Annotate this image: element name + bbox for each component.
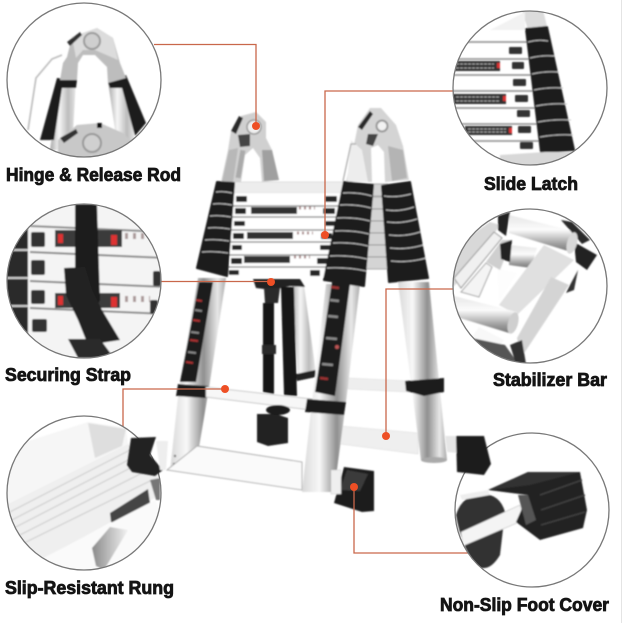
grips — [197, 182, 428, 286]
connector: foot cover — [350, 483, 483, 553]
connector: securing strap — [161, 278, 275, 286]
label: hinge: Hinge & Release Rod — [6, 165, 181, 185]
front foot — [331, 467, 374, 512]
panel: foot cover detail — [455, 433, 609, 587]
rear-left foot — [257, 414, 288, 446]
safety rung — [206, 387, 312, 410]
connector: slip-resistant rung — [123, 385, 229, 428]
connector: slide latch — [321, 91, 454, 239]
rear-left tube behind strap — [292, 285, 316, 376]
hinge: left — [221, 112, 279, 182]
rungs rear section — [363, 184, 391, 269]
connector: hinge — [154, 44, 260, 130]
rung stickers — [251, 207, 297, 214]
rung corner foot — [127, 437, 168, 476]
ladder illustration — [167, 108, 447, 512]
front right tube — [302, 282, 360, 492]
left tube — [170, 278, 226, 471]
rear right tube — [398, 282, 447, 463]
panel: slide latch detail — [452, 10, 607, 170]
panel: stabilizer bar detail — [450, 209, 607, 366]
hinge: right — [343, 108, 409, 182]
label: foot cover: Non-Slip Foot Cover — [440, 595, 609, 615]
label: securing strap: Securing Strap — [5, 365, 131, 385]
rungs front section — [228, 182, 346, 277]
securing strap — [253, 279, 305, 396]
panel: hinge detail — [7, 3, 161, 165]
panel: securing strap detail — [6, 203, 162, 359]
rear stabilizer bars — [340, 378, 418, 454]
label: slip-resistant rung: Slip-Resistant Rung — [5, 578, 174, 598]
latches — [229, 196, 337, 276]
label: slide latch: Slide Latch — [484, 174, 578, 194]
right foot — [445, 436, 491, 475]
label: stabilizer bar: Stabilizer Bar — [493, 370, 607, 390]
connector: stabilizer bar — [382, 289, 454, 440]
panel: slip-resistant rung detail — [0, 416, 168, 580]
bottom bar — [167, 446, 302, 490]
